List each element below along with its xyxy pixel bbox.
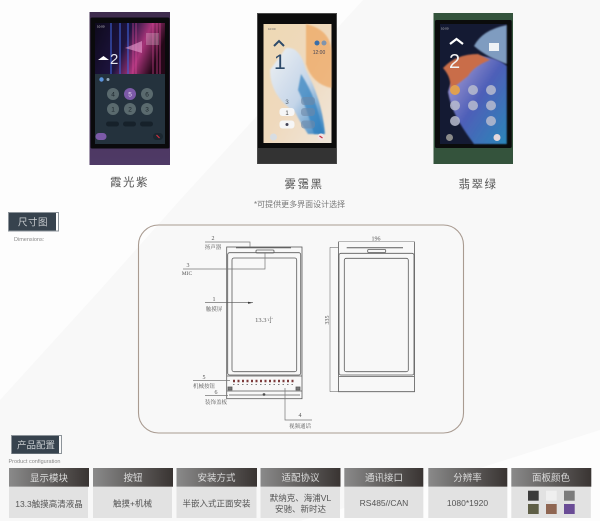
table column: panel colours: 面板颜色 xyxy=(532,472,570,484)
screen keypad: 4 xyxy=(111,92,115,98)
table column: installation: 安装方式 xyxy=(197,472,236,484)
table column: interface: 通讯接口 xyxy=(365,472,403,484)
callout: speaker xyxy=(205,236,250,251)
screen image: navy with orange and blue feather: 10:00 xyxy=(441,26,449,30)
callout: decorative cover: 6 xyxy=(214,390,218,396)
colour swatches xyxy=(528,491,575,514)
table column: display module: 显示模块 xyxy=(30,472,68,484)
callout: mechanical buttons: 5 xyxy=(202,375,206,381)
callout: video intercom xyxy=(285,388,312,430)
heading: dimensions xyxy=(8,212,58,231)
heading: product configuration: 产品配置 xyxy=(17,440,55,452)
callout: mic xyxy=(182,253,265,277)
note: *可提供更多界面设计选择 xyxy=(254,199,345,209)
table column: buttons: 触摸+机械 xyxy=(113,498,152,508)
callout: touch screen xyxy=(205,297,253,313)
caption: black: 雾霭黑 xyxy=(284,178,324,191)
screen image: beige and blue feather xyxy=(264,24,332,143)
table column: protocols: 默纳克、海浦VL xyxy=(270,493,331,503)
screen keypad: 1 xyxy=(111,106,115,114)
screen keypad: 3 xyxy=(145,106,149,114)
screen image: beige and blue feather: 3 xyxy=(285,100,289,106)
table column: interface: RS485//CAN xyxy=(360,498,408,508)
device: black xyxy=(257,13,337,164)
dimension: height: 335 xyxy=(325,316,331,324)
table column: interface xyxy=(344,468,423,518)
callout: mic: MIC xyxy=(182,271,193,277)
screen keypad: 6 xyxy=(145,92,149,98)
drawing: side view xyxy=(338,242,414,392)
screen image: purple neon xyxy=(95,23,165,74)
callout: decorative cover xyxy=(205,390,228,406)
table column: resolution: 1080*1920 xyxy=(447,498,488,508)
table column: installation xyxy=(176,468,257,518)
screen keypad xyxy=(95,74,165,144)
label: screen size: 13.3寸 xyxy=(255,315,273,324)
screen image: beige and blue feather: 1 xyxy=(274,51,286,74)
dimension: height xyxy=(325,247,338,392)
callout: video intercom: 视频通话 xyxy=(289,422,311,430)
heading: dimensions: 尺寸图 xyxy=(18,216,48,228)
caption: purple: 霞光紫 xyxy=(110,175,149,189)
table column: protocols: 安驰、新时达 xyxy=(275,504,326,514)
subheading: dimensions: Dimensions: xyxy=(14,237,45,243)
callout: video intercom: 4 xyxy=(298,413,302,419)
caption: green: 翡翠绿 xyxy=(458,177,498,191)
callout: speaker: 扬声器 xyxy=(205,243,222,251)
table column: buttons: 按钮 xyxy=(123,472,143,484)
screen image: navy with orange and blue feather: 2 xyxy=(449,51,460,73)
table column: protocols: 适配协议 xyxy=(281,472,320,484)
table column: resolution xyxy=(428,468,507,518)
dimension: width xyxy=(338,236,414,242)
panel: dimension drawings xyxy=(138,225,464,433)
device: green xyxy=(434,13,513,164)
heading: product configuration xyxy=(12,436,62,454)
drawing: front view xyxy=(227,247,302,399)
callout: mic: 3 xyxy=(186,263,190,269)
screen image: purple neon: 10:00 xyxy=(97,24,105,28)
screen image: beige and blue feather: 12:00 xyxy=(313,50,325,56)
table column: installation: 半嵌入式正面安装 xyxy=(182,498,251,508)
table column: buttons xyxy=(93,468,173,518)
table column: resolution: 分辨率 xyxy=(453,472,482,484)
screen keypad: 5 xyxy=(128,92,132,98)
device: purple xyxy=(90,12,170,165)
screen keypad: 2 xyxy=(128,106,132,114)
callout: decorative cover: 装饰盖板 xyxy=(205,398,227,406)
table column: panel colours xyxy=(511,468,591,518)
subheading: product configuration: Product configuration xyxy=(8,459,60,465)
table column: protocols xyxy=(260,468,340,518)
screen image: navy with orange and blue feather xyxy=(440,24,507,144)
callout: touch screen: 触摸屏 xyxy=(206,305,223,313)
screen image: beige and blue feather: 1 xyxy=(285,111,289,117)
callout: touch screen: 1 xyxy=(212,297,216,303)
screen image: beige and blue feather: 10:00 xyxy=(268,27,276,31)
table column: display module: 13.3触摸高清液晶 xyxy=(15,499,83,509)
screen image: purple neon: 2 xyxy=(110,51,118,68)
callout: mechanical buttons xyxy=(193,375,230,390)
dimension: width: 196 xyxy=(372,236,380,242)
callout: mechanical buttons: 机械按钮 xyxy=(193,382,215,390)
callout: speaker: 2 xyxy=(212,236,214,242)
table column: display module xyxy=(9,468,89,518)
